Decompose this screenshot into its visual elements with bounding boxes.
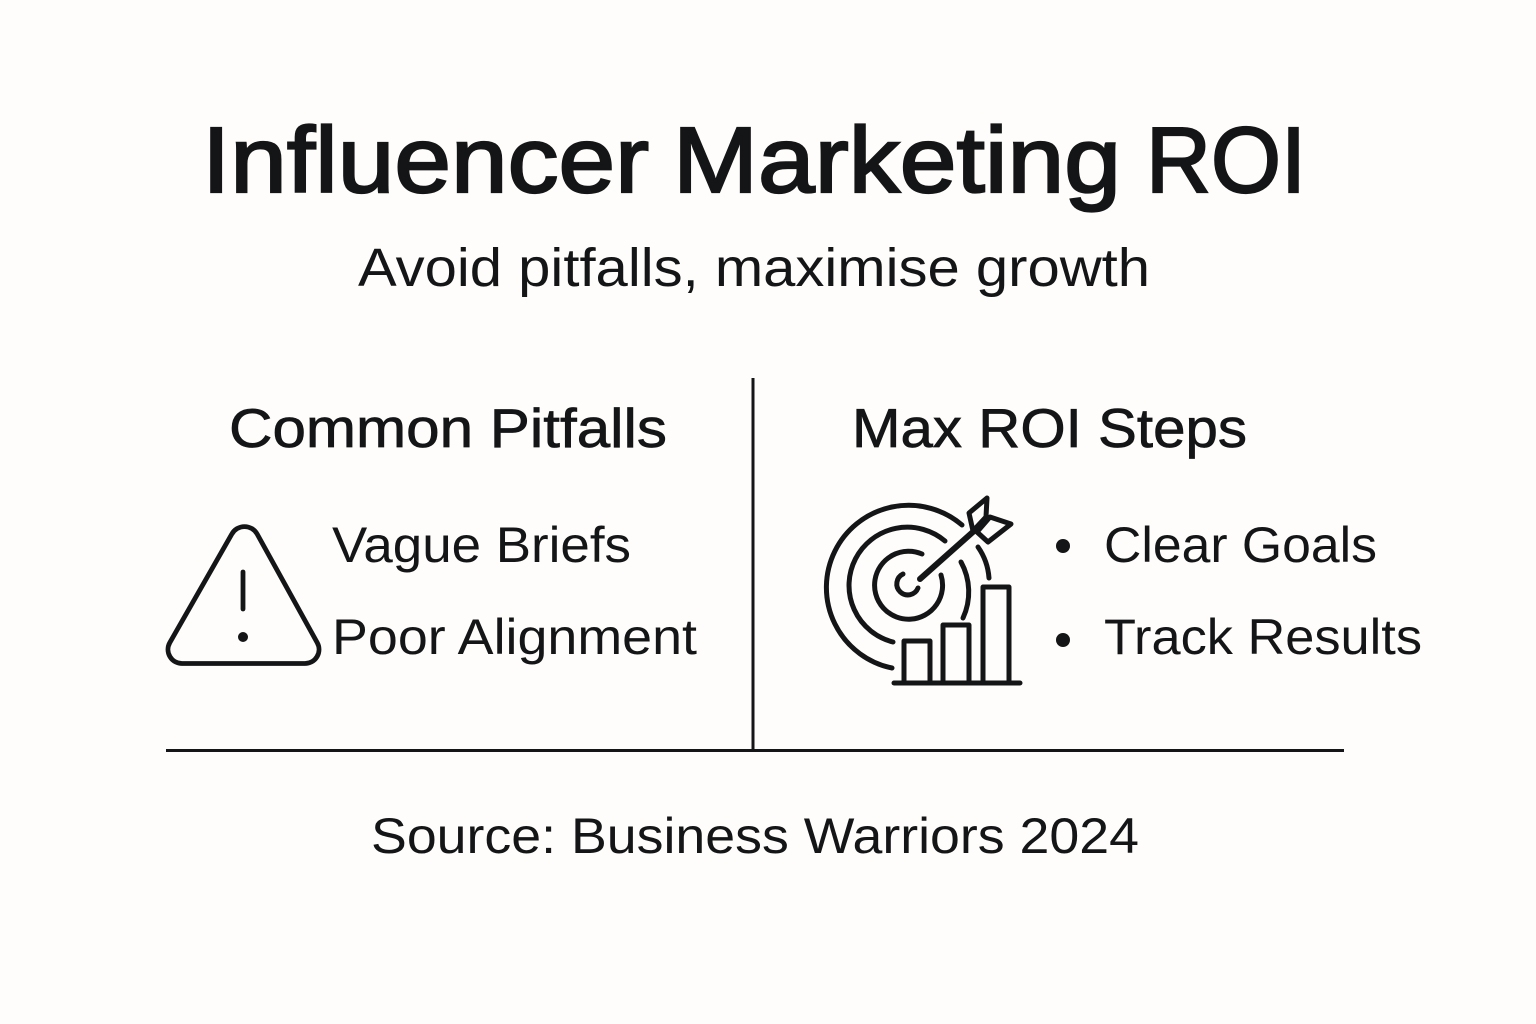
panel: common pitfalls <box>168 397 697 665</box>
icon: target with dart and bars <box>826 498 1020 683</box>
vertical divider <box>752 378 754 750</box>
step: track results: Track Results <box>1104 609 1422 665</box>
pitfall: poor alignment: Poor Alignment <box>332 609 697 665</box>
icon: warning triangle <box>168 527 319 664</box>
horizontal divider <box>166 749 1344 752</box>
pitfall: vague briefs: Vague Briefs <box>332 517 631 573</box>
step: clear goals: Clear Goals <box>1104 517 1377 573</box>
heading: max ROI steps: Max ROI Steps <box>852 397 1247 459</box>
subtitle: Avoid pitfalls, maximise growth <box>358 238 1150 298</box>
title: Influencer <box>202 108 649 212</box>
pitfall list <box>332 517 697 665</box>
panel: max ROI steps <box>826 397 1422 683</box>
source line: Source: Business Warriors 2024 <box>371 808 1139 864</box>
title <box>202 108 1306 212</box>
title: ROI <box>1146 108 1306 212</box>
heading: common pitfalls: Common Pitfalls <box>229 397 667 459</box>
title: Marketing <box>673 108 1121 212</box>
